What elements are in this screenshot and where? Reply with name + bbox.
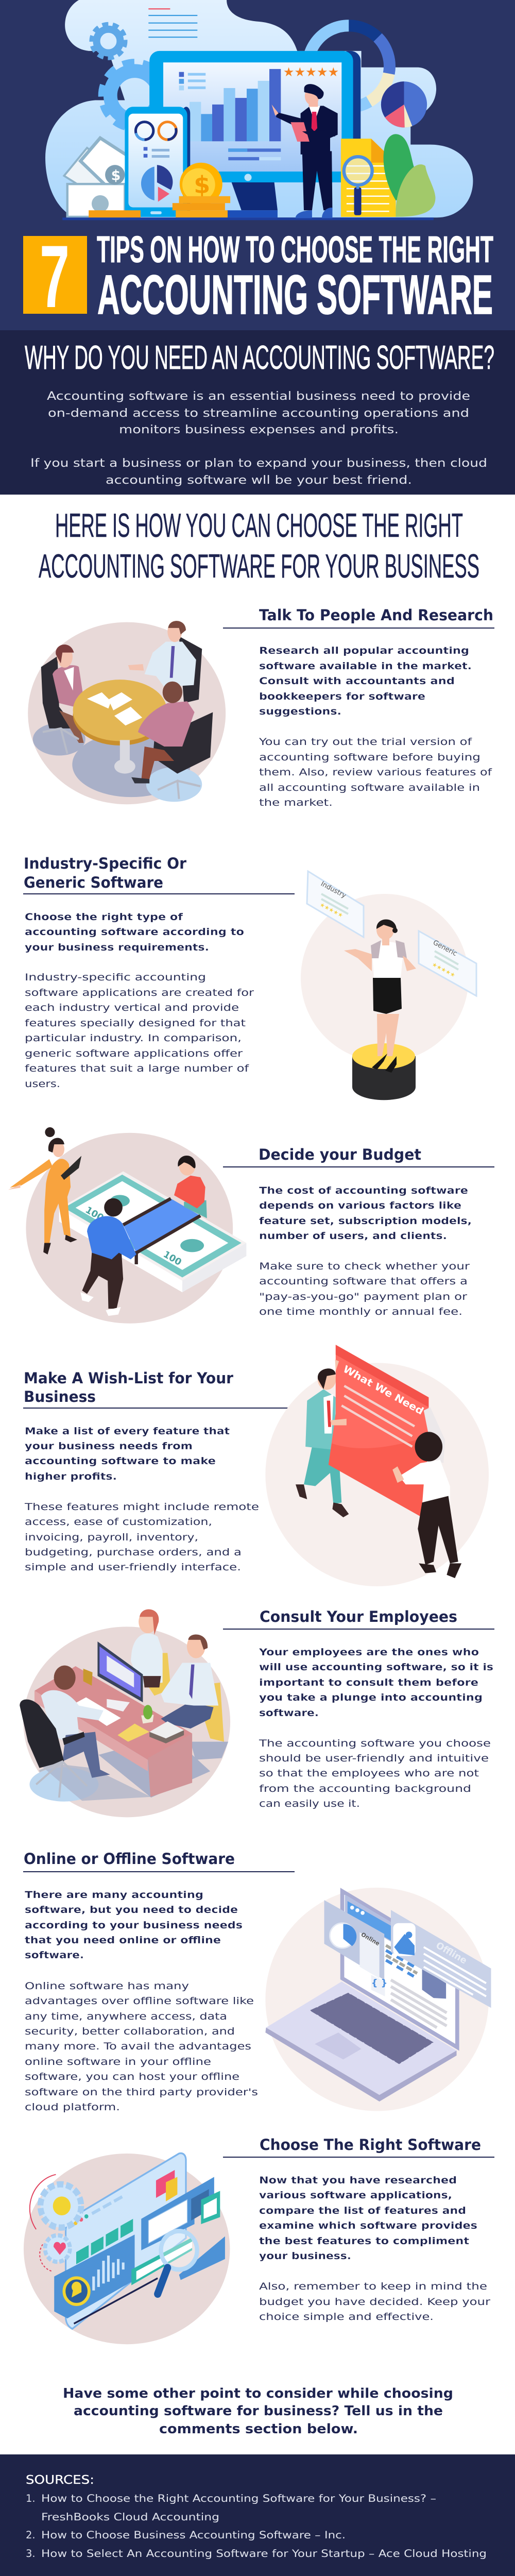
body text: advantages over offline software like [25, 1995, 254, 2007]
lead text: Consult with accountants and [259, 675, 455, 687]
panel: tip 4 make a wish-list [23, 1345, 489, 1586]
body text: invoicing, payroll, inventory, [25, 1532, 198, 1543]
hero illustration [45, 0, 473, 220]
body text: generic software applications offer [25, 1048, 243, 1059]
figure: standing woman [131, 1609, 163, 1687]
heading [24, 1369, 234, 1405]
lead text: according to your business needs [25, 1920, 243, 1931]
body text: software, you can host your offline [25, 2071, 239, 2082]
illustration: woman choosing between cards [301, 871, 476, 1100]
section heading [39, 506, 479, 585]
heading: Choose The Right Software [260, 2136, 481, 2154]
heading: Decide your Budget [259, 1146, 421, 1163]
lead text: you take a plunge into accounting [259, 1692, 483, 1703]
title [97, 229, 493, 326]
illustration: laptop with online and offline windows: Offline [434, 1940, 469, 1967]
body text: Make sure to check whether your [259, 1261, 470, 1272]
figure: man at keyboard [20, 1666, 110, 1798]
lead text: that you need online or offline [25, 1935, 221, 1946]
body text [259, 2281, 490, 2323]
lead text: Research all popular accounting [259, 645, 469, 656]
body text: Industry-specific accounting [25, 972, 206, 983]
body text [25, 972, 254, 1090]
heading: Consult Your Employees [260, 1608, 457, 1625]
sources: How to Choose the Right Accounting Software for Your Business? – [41, 2493, 436, 2504]
closing callout: Have some other point to consider while choosing [63, 2386, 453, 2401]
panel: footer [0, 2454, 515, 2576]
body text: the market. [259, 797, 333, 808]
body text [25, 1980, 258, 2113]
heading: Industry-Specific Or [24, 855, 187, 872]
illustration: laptop with online and offline windows: { } [371, 1978, 387, 1989]
lead text: compare the list of features and [259, 2205, 466, 2216]
body text: cloud platform. [25, 2102, 120, 2113]
sources: 2. [26, 2529, 36, 2541]
sources: 3. [26, 2548, 36, 2560]
body text [259, 1261, 470, 1317]
sources: SOURCES: [26, 2473, 94, 2487]
illustration: meeting at round table [28, 621, 226, 804]
lead text: number of users, and clients. [259, 1230, 447, 1242]
panel: tip 3 decide your budget [8, 1127, 494, 1324]
lead text [25, 911, 244, 953]
lead text: Your employees are the ones who [259, 1647, 479, 1658]
lead text: the best features to compliment [259, 2235, 469, 2247]
illustration: woman choosing between cards: ★★★★★ [319, 901, 344, 919]
lead text: software, but you need to decide [25, 1904, 238, 1916]
lead text: software. [25, 1950, 84, 1961]
heading [24, 855, 187, 891]
body text: The accounting software you choose [259, 1738, 491, 1749]
body text: features that suit a large number of [25, 1063, 250, 1074]
illustration: team carrying money stack [8, 1127, 246, 1324]
lead text: software available in the market. [259, 660, 472, 672]
body text: accounting software that offers a [259, 1276, 468, 1287]
panel: tip 7 choose the right software [24, 2136, 494, 2344]
figure: man in blue [80, 1198, 136, 1316]
panel: hero header [0, 0, 515, 331]
body text: security, better collaboration, and [25, 2026, 235, 2037]
heading: Make A Wish-List for Your [24, 1369, 234, 1387]
heading: Business [24, 1388, 96, 1405]
sources: How to Select An Accounting Software for Your Startup – Ace Cloud Hosting [41, 2548, 487, 2560]
body text: particular industry. In comparison, [25, 1032, 242, 1044]
heading: Talk To People And Research [259, 606, 493, 624]
figure: presenter [271, 84, 338, 218]
illustration: team holding what we need list [265, 1345, 489, 1586]
lead text: The cost of accounting software [259, 1185, 468, 1196]
lead text: accounting software according to [25, 926, 244, 938]
intro text [30, 390, 487, 487]
figure: seated man [161, 1634, 218, 1728]
intro text: monitors business expenses and profits. [119, 423, 399, 436]
body text: software on the third party provider's [25, 2087, 258, 2098]
illustration: woman choosing between cards: Generic [432, 939, 458, 958]
body text: budgeting, purchase orders, and a [25, 1547, 242, 1558]
lead text: Now that you have researched [259, 2175, 457, 2186]
body text: from the accounting background [259, 1783, 471, 1794]
lead text [25, 1889, 243, 1961]
lead text: your business. [259, 2250, 351, 2262]
lead text: higher profits. [25, 1471, 117, 1482]
lead text: There are many accounting [25, 1889, 203, 1901]
lead text [25, 1426, 230, 1482]
body text: software applications are created for [25, 987, 254, 998]
closing callout: comments section below. [159, 2421, 358, 2437]
lead text: Choose the right type of [25, 911, 183, 923]
panel: tip 6 online or offline [23, 1850, 491, 2113]
body text: many more. To avail the advantages [25, 2041, 251, 2052]
illustration: team carrying money stack: 100 [83, 1205, 106, 1224]
lead text [259, 1647, 493, 1719]
body text: features specially designed for that [25, 1018, 246, 1029]
body text: accounting software before buying [259, 752, 480, 763]
body text [24, 1501, 259, 1573]
panel: why you need accounting software [0, 330, 515, 495]
body text: Online software has many [25, 1980, 189, 1992]
intro text: Accounting software is an essential business need to provide [47, 390, 470, 403]
intro text: on-demand access to streamline accounting operations and [48, 407, 469, 420]
body text: These features might include remote [24, 1501, 259, 1513]
body text: choice simple and effective. [259, 2311, 434, 2323]
body text: them. Also, review various features of [259, 767, 493, 778]
lead text: important to consult them before [259, 1677, 478, 1688]
figure: woman in orange [8, 1127, 81, 1255]
figure: woman in white [392, 1407, 461, 1578]
figure: woman in red [174, 1156, 207, 1218]
illustration: dashboard and magnifier [24, 2153, 230, 2344]
body text: so that the employees who are not [259, 1768, 479, 1779]
lead text [259, 2175, 477, 2262]
hero illustration: $ [111, 168, 121, 184]
body text: any time, anywhere access, data [25, 2011, 227, 2022]
body text: one time monthly or annual fee. [259, 1306, 462, 1317]
sources: How to Choose Business Accounting Software – Inc. [41, 2529, 346, 2541]
body text: should be user-friendly and intuitive [259, 1753, 489, 1764]
lead text: various software applications, [259, 2190, 452, 2201]
illustration: laptop with online and offline windows [265, 1888, 491, 2111]
illustration: office desk with employees [20, 1609, 230, 1817]
lead text: Make a list of every feature that [25, 1426, 230, 1437]
body text: access, ease of customization, [25, 1516, 212, 1528]
heading: Online or Offline Software [24, 1850, 235, 1868]
panel: tip 2 industry-specific or generic [23, 855, 476, 1100]
body text [259, 736, 493, 808]
intro text: If you start a business or plan to expand your business, then cloud [30, 457, 487, 470]
title badge: 7: 7 [40, 227, 70, 326]
intro text: accounting software wll be your best friend. [106, 474, 412, 487]
illustration: team carrying money stack: 100 [161, 1249, 183, 1268]
sources: FreshBooks Cloud Accounting [41, 2511, 219, 2523]
hero illustration: $ [194, 171, 210, 199]
body text: simple and user-friendly interface. [25, 1562, 241, 1573]
illustration: team holding what we need list: What We Need [341, 1363, 426, 1417]
body text: each industry vertical and provide [25, 1002, 239, 1013]
body text: You can try out the trial version of [259, 736, 473, 748]
lead text: accounting software to make [25, 1455, 216, 1467]
lead text: bookkeepers for software [259, 691, 425, 702]
lead text: your business needs from [25, 1440, 193, 1452]
body text: users. [25, 1078, 60, 1090]
body text: online software in your offline [25, 2056, 211, 2067]
lead text [259, 1185, 472, 1242]
body text: Also, remember to keep in mind the [259, 2281, 487, 2292]
figure: man in teal [296, 1368, 349, 1517]
sources: 1. [26, 2493, 36, 2504]
lead text: your business requirements. [25, 942, 209, 953]
body text [259, 1738, 491, 1809]
body text: budget you have decided. Keep your [259, 2296, 490, 2308]
closing callout [63, 2386, 453, 2437]
body text: can easily use it. [259, 1798, 360, 1809]
lead text [259, 645, 472, 717]
lead text: will use accounting software, so it is [259, 1662, 493, 1673]
illustration: laptop with online and offline windows: Online [360, 1931, 381, 1947]
panel: tip 5 consult your employees [20, 1608, 494, 1817]
body text: "pay-as-you-go" payment plan or [259, 1291, 467, 1302]
lead text: feature set, subscription models, [259, 1215, 472, 1227]
sources [26, 2473, 487, 2560]
panel: tip 1 talk to people [28, 606, 494, 808]
lead text: software. [259, 1707, 319, 1719]
lead text: suggestions. [259, 706, 341, 717]
hero illustration: ★★★★★ [283, 65, 339, 79]
heading: Generic Software [24, 874, 163, 891]
lead text: depends on various factors like [259, 1200, 461, 1211]
illustration: woman choosing between cards: ★★★★★ [431, 961, 456, 979]
lead text: examine which software provides [259, 2220, 477, 2231]
illustration: woman choosing between cards: Industry [319, 880, 348, 900]
body text: all accounting software available in [259, 782, 480, 793]
closing callout: accounting software for business? Tell us in the [74, 2403, 443, 2419]
